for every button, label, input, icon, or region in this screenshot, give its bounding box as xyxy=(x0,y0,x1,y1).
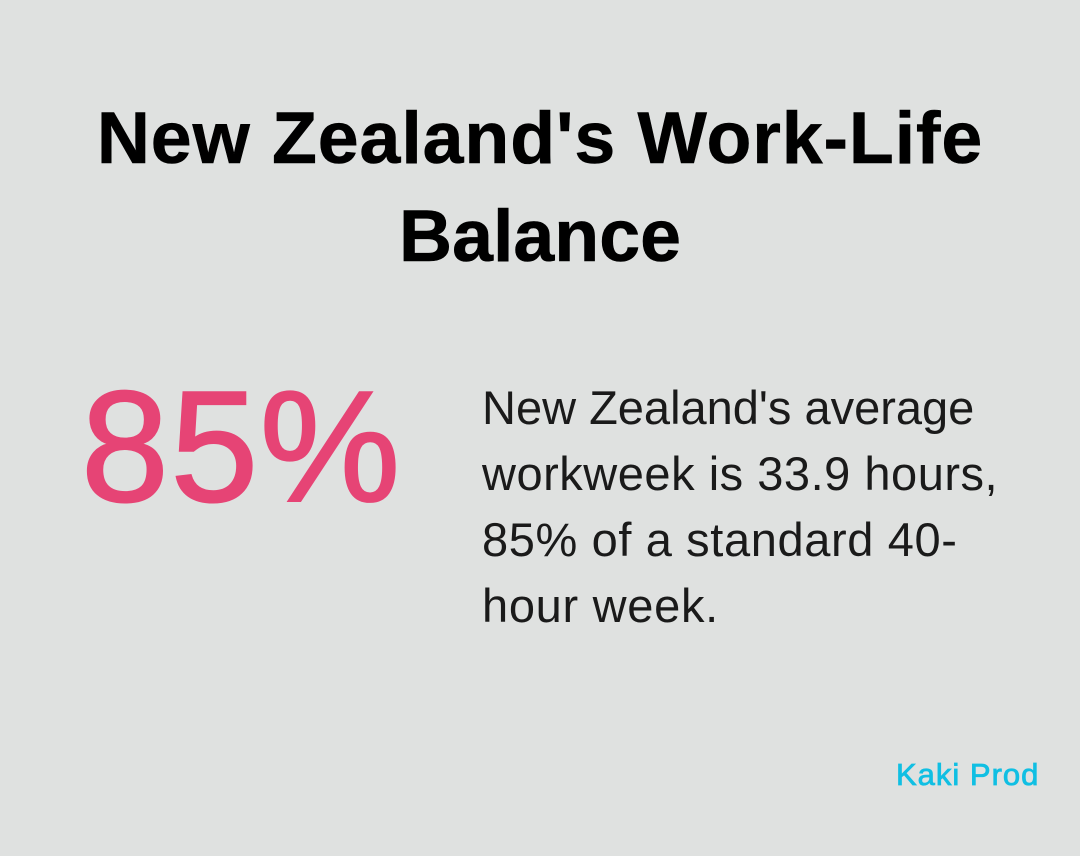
big stat: 85%: 85% xyxy=(81,359,402,535)
description text: 85% of a standard 40- xyxy=(482,513,958,566)
title: Balance xyxy=(399,194,681,277)
title: New Zealand's Work-Life xyxy=(97,96,983,179)
description text: hour week. xyxy=(482,579,719,632)
description text: New Zealand's average xyxy=(482,381,974,434)
description text: workweek is 33.9 hours, xyxy=(482,447,998,500)
title xyxy=(97,96,983,277)
logo: Kaki Prod: Kaki Prod xyxy=(896,757,1039,792)
description text xyxy=(482,381,998,632)
